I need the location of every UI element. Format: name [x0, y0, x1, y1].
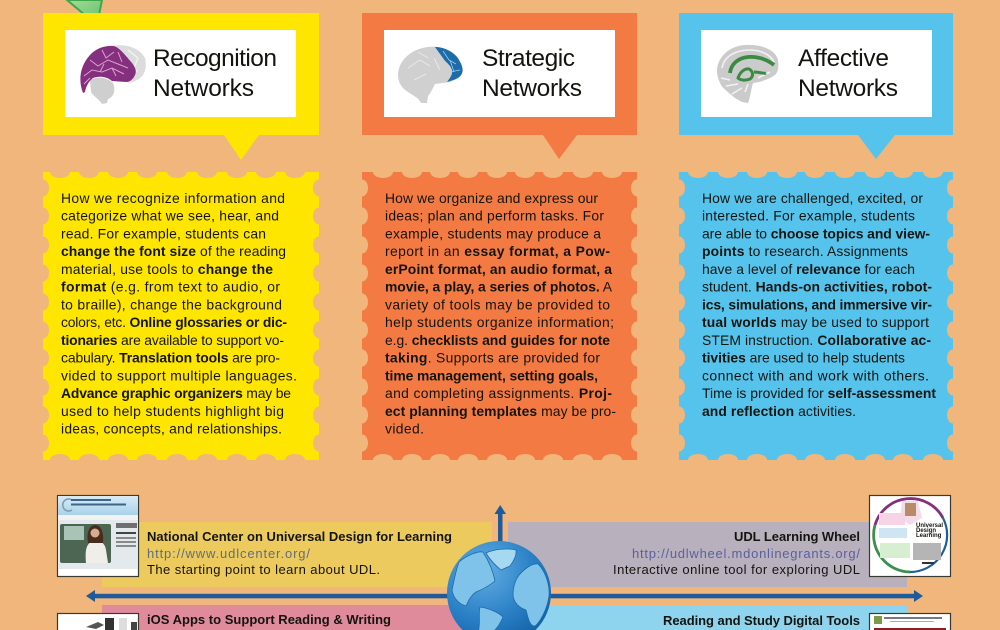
text block: affective description: are able to choose topics and view- [702, 226, 930, 242]
thumbnail: technology and learning site [870, 614, 950, 630]
resource bar: iOS Apps: iOS Apps to Support Reading & Writing [147, 612, 391, 627]
resource bar: National Center on UDL: http://www.udlcenter.org/ [147, 546, 310, 561]
text block: recognition description: change the font size of the reading [61, 243, 286, 259]
thumbnail: UDL center website [58, 496, 138, 576]
thumbnail: UDL learning wheel [870, 496, 950, 576]
text block: recognition description: used to help students highlight big [61, 403, 284, 419]
heading: Recognition Networks: Recognition [153, 45, 277, 72]
text block: recognition description: cabulary. Translation tools are pro- [61, 350, 280, 366]
panel: affective networks header [679, 13, 953, 159]
resource bar: UDL Learning Wheel: Interactive online tool for exploring UDL [613, 562, 860, 577]
text block: affective description: Time is provided for self-assessment [702, 385, 936, 401]
text block: recognition description: tionaries are available to support vo- [61, 332, 284, 348]
text block: recognition description: colors, etc. Online glossaries or dic- [61, 314, 287, 330]
heading: Strategic Networks: Strategic [482, 45, 575, 72]
resource bar: National Center on UDL: The starting point to learn about UDL. [147, 562, 380, 577]
text block: strategic description: ideas; plan and perform tasks. For [385, 208, 604, 224]
heading: Affective Networks: Networks [798, 75, 898, 102]
text block: strategic description: vided. [385, 421, 424, 437]
resource bar: National Center on UDL [102, 522, 492, 587]
text block: affective description: have a level of relevance for each [702, 261, 915, 277]
text block: recognition description: material, use tools to change the [61, 261, 273, 277]
resource bar: UDL Learning Wheel [508, 522, 907, 587]
text block: strategic description: e.g. checklists and guides for note [385, 332, 610, 348]
text block: affective description: tivities are used to help students [702, 350, 905, 366]
thumbnail: iOS apps [58, 614, 138, 630]
text block: strategic description: example, students may produce a [385, 226, 601, 242]
text block: affective description: STEM instruction. Collaborative ac- [702, 332, 931, 348]
heading: Affective Networks: Affective [798, 45, 889, 72]
icon: brain with blue front region [398, 47, 463, 103]
panel: strategic networks header [362, 13, 637, 159]
resource bar: UDL Learning Wheel: http://udlwheel.mdonlinegrants.org/ [632, 546, 860, 561]
text block: recognition description: categorize what we see, hear, and [61, 208, 279, 224]
text block: strategic description: ect planning templates may be pro- [385, 403, 616, 419]
text block: affective description: interested. For example, students [702, 208, 915, 224]
arrow: horizontal left [86, 590, 455, 602]
text block: recognition description: to braille), change the background [61, 296, 282, 312]
text block: affective description: connect with and work with others. [702, 368, 929, 384]
text block: strategic description: erPoint format, an audio format, a [385, 261, 612, 277]
panel: strategic description stamp [356, 166, 643, 466]
text block: strategic description: help students organize information; [385, 314, 614, 330]
text block: strategic description: How we organize and express our [385, 190, 598, 206]
text block: affective description: How we are challenged, excited, or [702, 190, 923, 206]
text block: affective description [702, 190, 936, 419]
heading: Affective Networks [798, 45, 898, 102]
text block: recognition description: vided to support multiple languages. [61, 368, 297, 384]
text block: recognition description: How we recognize information and [61, 190, 285, 206]
resource bar: Reading and Study Digital Tools [520, 605, 907, 630]
text block: recognition description: format (e.g. from text to audio, or [61, 279, 280, 295]
text block: strategic description: and completing assignments. Proj- [385, 385, 612, 401]
thumbnail: UDL learning wheel: Design [916, 528, 936, 534]
panel: affective description stamp [673, 166, 959, 466]
text block: recognition description: Advance graphic organizers may be [61, 385, 291, 401]
text block: recognition description: read. For example, students can [61, 226, 266, 242]
icon: brain cross-section with green region [717, 45, 778, 103]
text block: affective description: ics, simulations, and immersive vir- [702, 296, 932, 312]
text block: affective description: and reflection activities. [702, 403, 856, 419]
arrow: vertical up [494, 505, 506, 552]
text block: strategic description [385, 190, 616, 437]
heading: Recognition Networks: Networks [153, 75, 254, 102]
text block: affective description: tual worlds may be used to support [702, 314, 929, 330]
resource bar: iOS Apps [102, 605, 482, 630]
heading: Strategic Networks: Networks [482, 75, 582, 102]
text block: strategic description: variety of tools may be provided to [385, 296, 610, 312]
heading: Strategic Networks [482, 45, 582, 102]
resource bar: UDL Learning Wheel: UDL Learning Wheel [734, 529, 860, 544]
text block: recognition description [61, 190, 297, 437]
icon: brain with purple back region [80, 45, 146, 104]
resource bar: National Center on UDL: National Center on Universal Design for Learning [147, 529, 452, 544]
icon: green marker at top [67, 0, 102, 25]
panel: recognition networks header [43, 13, 319, 160]
text block: strategic description: movie, a play, a series of photos. A [385, 279, 613, 295]
arrow: horizontal right [545, 590, 923, 602]
icon: globe [447, 541, 551, 630]
text block: strategic description: time management, setting goals, [385, 368, 598, 384]
text block: strategic description: taking. Supports are provided for [385, 350, 600, 366]
resource bar: Reading and Study Digital Tools: Reading and Study Digital Tools [663, 613, 860, 628]
thumbnail: UDL learning wheel: Learning [916, 533, 942, 539]
text block: recognition description: ideas, concepts, and relationships. [61, 421, 282, 437]
text block: affective description: student. Hands-on activities, robot- [702, 279, 932, 295]
heading: Recognition Networks [153, 45, 277, 102]
panel: recognition description stamp [37, 166, 325, 466]
thumbnail: UDL learning wheel: Universal [916, 523, 943, 529]
text block: affective description: points to research. Assignments [702, 243, 908, 259]
text block: strategic description: report in an essay format, a Pow- [385, 243, 610, 259]
